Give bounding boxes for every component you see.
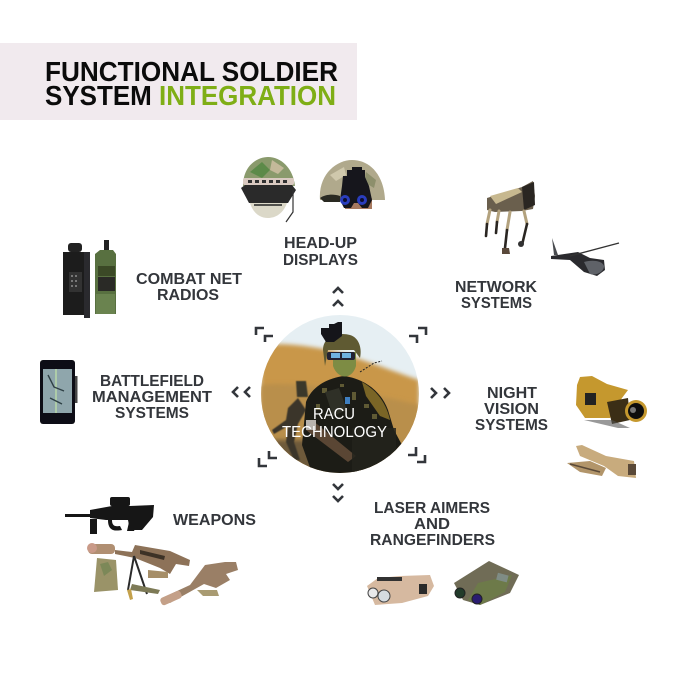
label: network systems: SYSTEMS (461, 295, 532, 312)
arrows: up (333, 288, 343, 306)
icon: bullpup rifle (65, 497, 154, 534)
icon: robot dog (486, 181, 535, 254)
icon: machine gun and kit (87, 543, 238, 606)
title banner: SYSTEM INTEGRATION (45, 80, 336, 111)
label: head-up displays: HEAD-UP (284, 235, 357, 252)
label: battlefield management systems: SYSTEMS (115, 405, 189, 422)
label: battlefield management systems: BATTLEFIELD (100, 373, 204, 390)
corner brackets: bottom left (259, 451, 277, 466)
icon: nano drone (551, 238, 619, 276)
icon: helmet with night vision goggles (320, 160, 385, 209)
center label: RACU (313, 406, 355, 423)
arrows: down (333, 484, 343, 501)
label: network systems: NETWORK (455, 279, 538, 296)
icon: AR helmet (241, 157, 296, 222)
label: laser aimers and rangefinders: AND (414, 516, 450, 533)
icon: weapon-mounted sight (567, 445, 636, 478)
label: head-up displays: DISPLAYS (283, 252, 358, 269)
central photo: soldier in desert (261, 315, 419, 473)
label: laser aimers and rangefinders: LASER AIMERS (374, 500, 490, 517)
label: combat net radios: RADIOS (157, 287, 219, 304)
icon: laser aimer green (454, 561, 519, 605)
icon: thermal monocular (576, 376, 647, 428)
corner brackets: top right (409, 328, 426, 343)
label: combat net radios (136, 271, 243, 304)
label: battlefield management systems: MANAGEMENT (92, 389, 213, 406)
label: head-up displays (283, 235, 358, 269)
arrows: left (233, 387, 250, 397)
label: laser aimers and rangefinders: RANGEFINDERS (370, 532, 495, 549)
title banner (0, 43, 357, 120)
label: night vision systems (475, 385, 548, 434)
label: battlefield management systems (92, 373, 213, 422)
label: night vision systems: NIGHT (487, 385, 538, 402)
label: weapons: WEAPONS (173, 512, 256, 529)
central photo: soldier in desert: TECHNOLOGY (282, 424, 387, 441)
label: network systems (455, 279, 538, 312)
corner brackets: bottom right (408, 447, 425, 462)
icon: green radio (95, 240, 116, 314)
icon: black radio (63, 243, 90, 318)
label: night vision systems: SYSTEMS (475, 417, 548, 434)
infographic canvas (0, 43, 647, 606)
label: laser aimers and rangefinders (370, 500, 495, 549)
title banner: FUNCTIONAL SOLDIER (45, 56, 338, 87)
icon: tablet device (40, 360, 78, 424)
icon: laser aimer tan (367, 575, 434, 605)
corner brackets: top left (256, 328, 273, 342)
arrows: right (431, 388, 449, 398)
label: night vision systems: VISION (484, 401, 539, 418)
label: combat net radios: COMBAT NET (136, 271, 243, 288)
